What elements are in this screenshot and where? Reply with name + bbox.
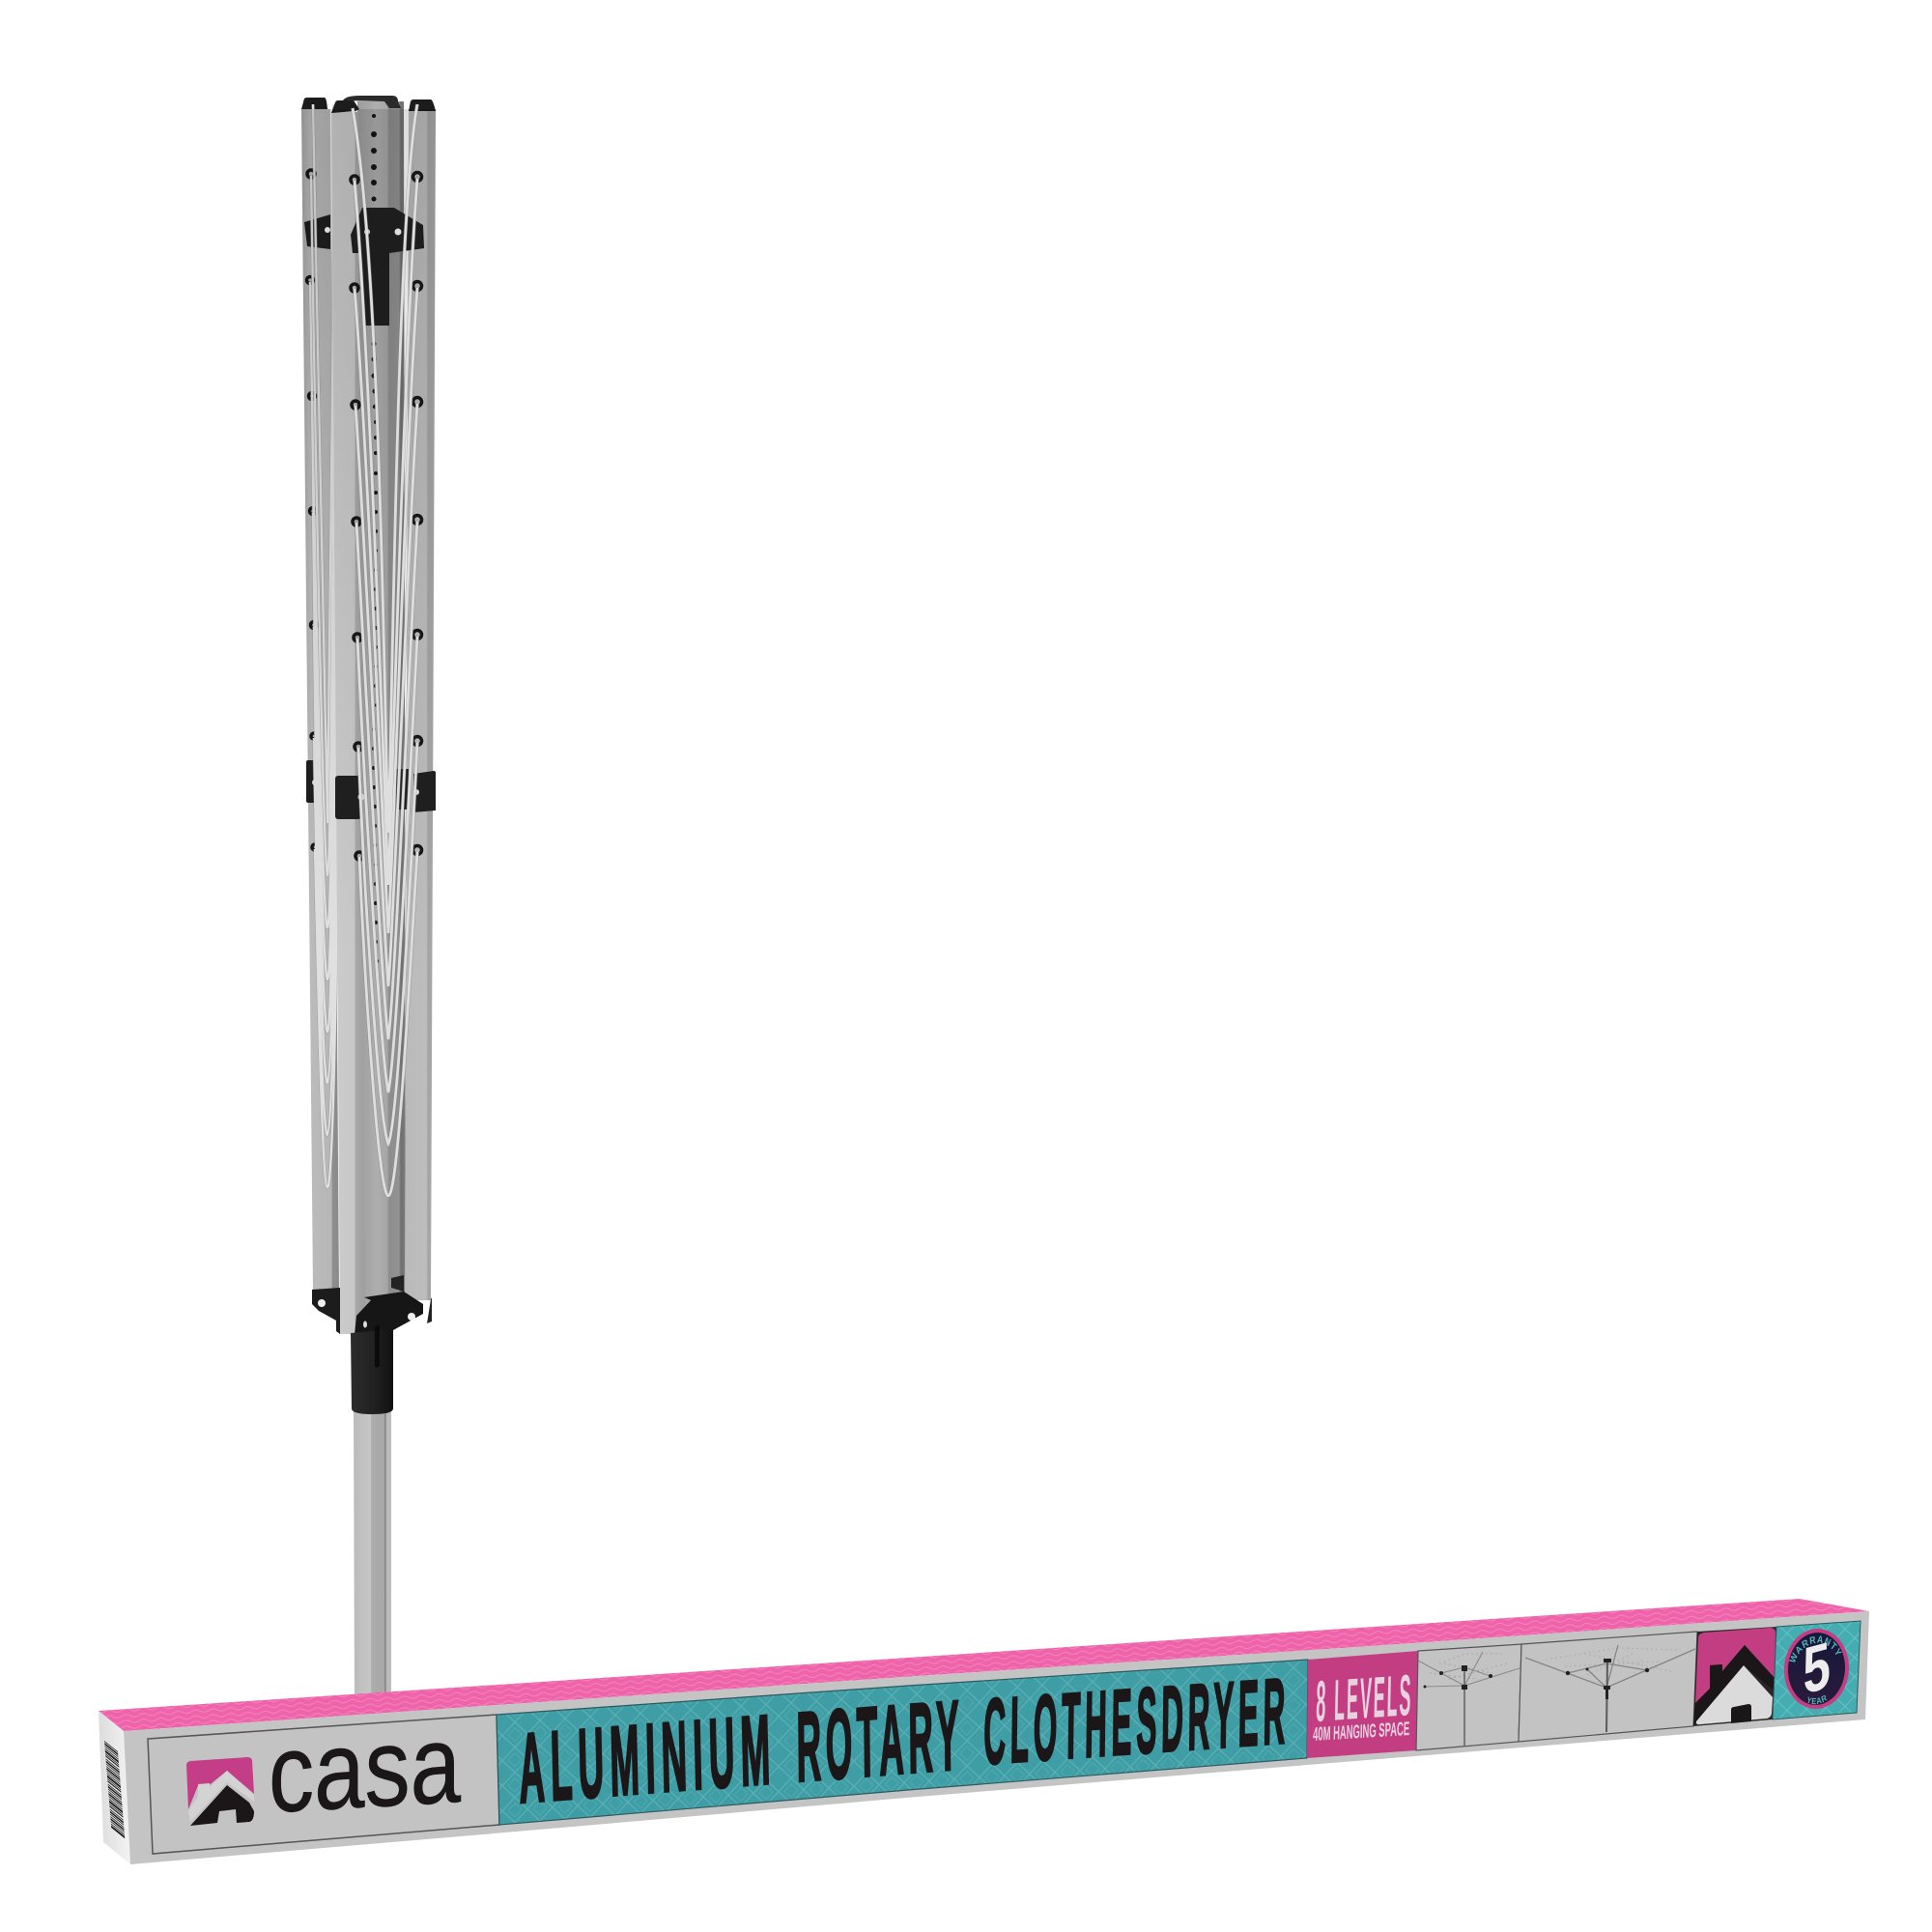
teal background [1773,1621,1861,1719]
title word 2: ROTARY [796,1681,959,1804]
panel: 8 levels: 40M HANGING SPACE [1313,1719,1409,1746]
box top, pink [99,1599,1869,1731]
badge centre [1785,1631,1848,1707]
product box [99,1599,1869,1864]
panel: casa logo [148,1702,499,1854]
warranty arc text [1789,1636,1842,1704]
front arm cap [331,100,359,113]
lower support pole [354,1406,391,1705]
panel: title [497,1660,1308,1825]
arm 1 hooks [307,170,318,850]
centre arm cap [343,96,401,108]
right arm [405,109,436,1300]
pink background [1307,1651,1418,1758]
pole [1463,1666,1465,1746]
title word 1: ALUMINIUM [518,1696,771,1825]
door [1731,1704,1751,1723]
diagonal bracket [391,1275,404,1292]
panel: warranty [1772,1621,1861,1719]
white house [1696,1665,1773,1724]
front arm [331,112,365,1334]
diagram background [1416,1644,1521,1750]
barcode bars [111,1747,118,1834]
right arm cap [409,99,436,111]
hubs [1566,1659,1649,1699]
arm 1 clips [304,214,330,803]
panel frame [148,1715,499,1854]
hub collar [351,1329,393,1414]
casa wordmark: casa [269,1702,461,1836]
panel: house icon [1693,1627,1776,1726]
pink background [1695,1628,1776,1703]
logo icon [186,1757,254,1826]
levels heading: 8 LEVELS [1316,1663,1411,1735]
arm 1 wires [310,104,337,1187]
panel: 8 levels [1307,1651,1418,1758]
mid arm clips [335,769,436,819]
warranty arc text: YEAR [1808,1695,1828,1704]
web of lines [1546,1648,1681,1676]
clothes line wires [353,104,417,1196]
black roof [1693,1645,1775,1726]
teal background [497,1660,1308,1825]
title word 3: CLOTHESDRYER [983,1660,1286,1785]
clip rivets [312,227,419,800]
hooks on front and right arms [351,172,421,860]
arms [1525,1645,1695,1688]
left bottom bracket [312,1288,340,1321]
web of lines [1430,1654,1507,1679]
panel: dryer diagram 1 [1416,1644,1521,1750]
box front face [124,1611,1869,1864]
centre pole [357,101,406,1314]
diagram background [1519,1632,1697,1742]
dark panel background [1693,1627,1776,1726]
hubs [1424,1665,1492,1690]
front arm foot [336,1309,340,1334]
pole [1606,1660,1607,1732]
pole holes [371,114,379,963]
arms [1418,1652,1520,1687]
number 5: 5 [1803,1628,1831,1708]
upper centre bracket [351,208,424,326]
rotary clothes dryer, folded [301,96,436,1705]
bottom hub bracket [355,1292,432,1335]
warranty arc text: WARRANTY [1789,1636,1842,1662]
box end panel [99,1711,130,1864]
panel: dryer diagram 2 [1519,1632,1697,1742]
arm 1 black cap [301,98,327,109]
badge ring [1781,1627,1852,1711]
arm 1 [301,109,339,1290]
locking lever [375,1325,380,1368]
